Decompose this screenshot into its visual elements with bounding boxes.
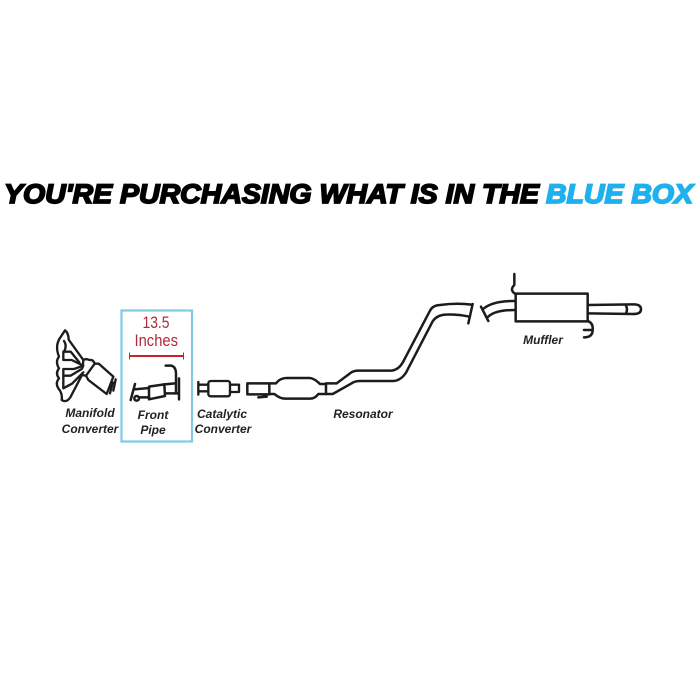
- label: front pipe: Pipe: [140, 423, 166, 437]
- label: catalytic converter: Catalytic: [197, 407, 247, 421]
- icon: resonator pipe: [247, 304, 473, 399]
- label: catalytic converter: [195, 407, 253, 436]
- icon: manifold converter: [57, 330, 116, 401]
- label: front pipe: [138, 408, 169, 437]
- label: manifold converter: Manifold: [65, 406, 115, 420]
- dimension: 13.5 inches: 13.5: [142, 313, 170, 332]
- label: manifold converter: Converter: [62, 422, 120, 436]
- title: YOU'RE PURCHASING WHAT IS IN THE: [4, 179, 540, 209]
- icon: front pipe: [131, 366, 179, 401]
- icon: catalytic converter: [198, 381, 239, 396]
- panel: blue box highlighting front pipe: [122, 310, 192, 442]
- label: front pipe: Front: [138, 408, 169, 422]
- label: resonator: Resonator: [333, 407, 394, 421]
- dimension: 13.5 inches: Inches: [134, 331, 178, 350]
- label: catalytic converter: Converter: [195, 422, 253, 436]
- label: muffler: Muffler: [523, 333, 564, 347]
- title: BLUE BOX: [546, 179, 695, 209]
- dimension: 13.5 inches: [130, 313, 184, 360]
- label: manifold converter: [62, 406, 120, 436]
- icon: muffler: [481, 274, 641, 337]
